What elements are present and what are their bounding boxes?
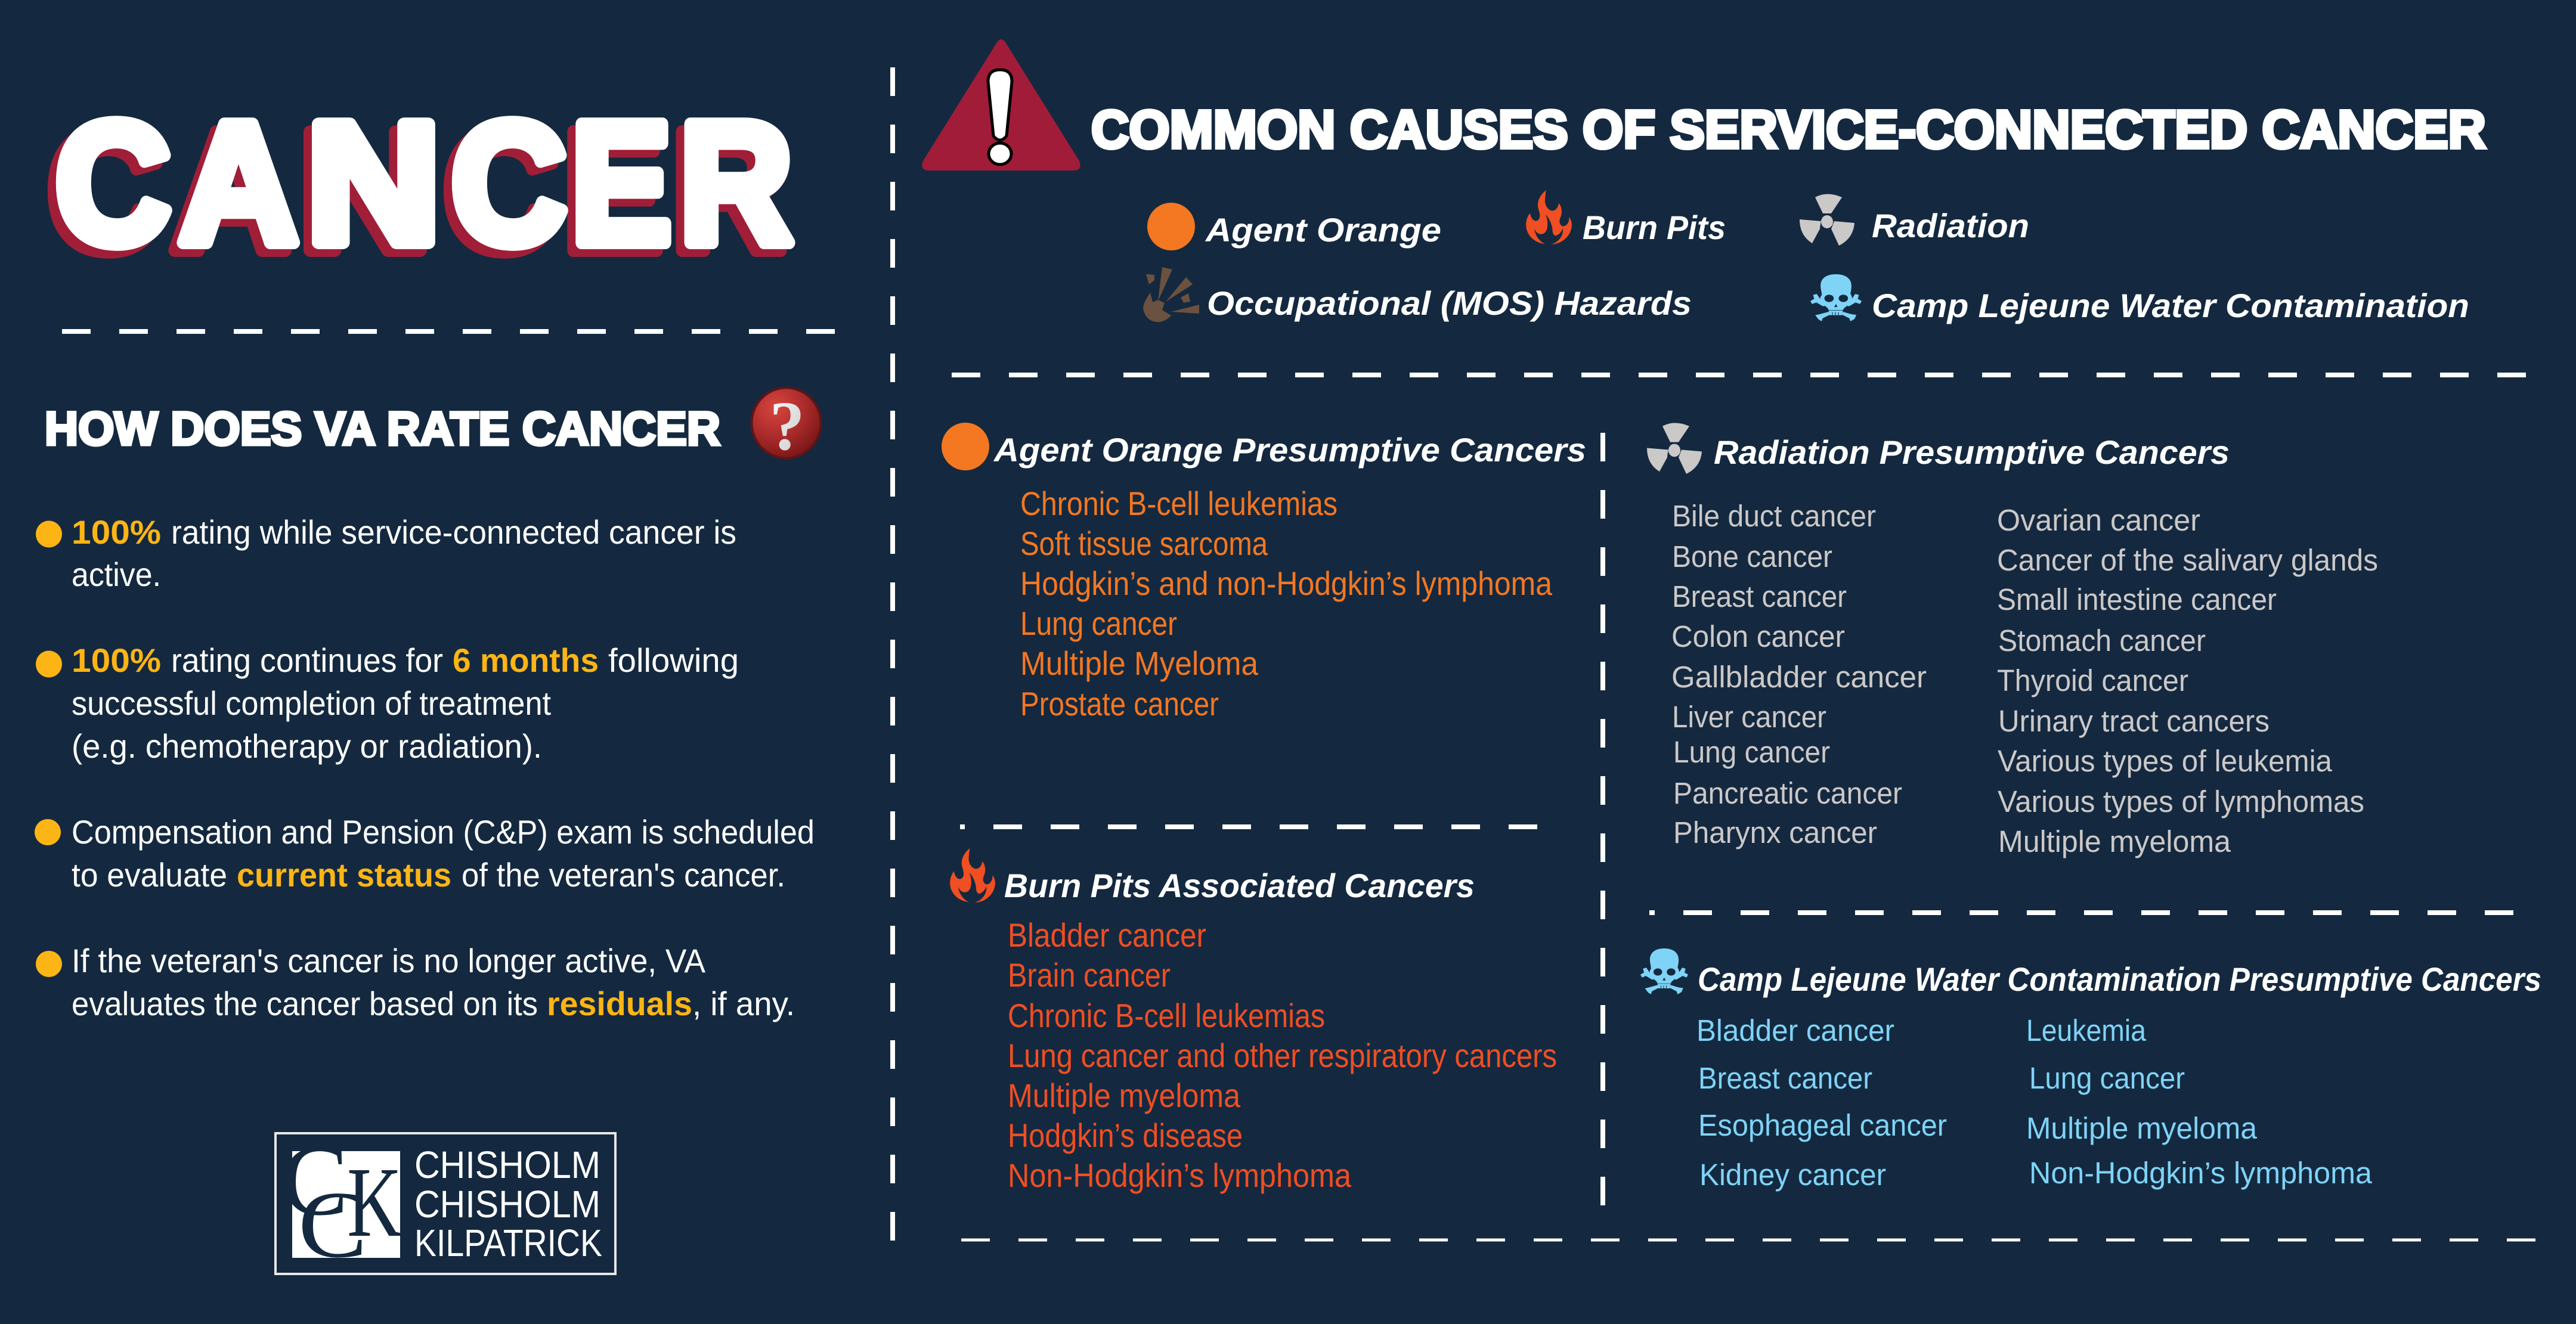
legend: common causes: Agent Orange: [1205, 211, 1441, 249]
legend: common causes: Occupational (MOS) Hazards: [1207, 284, 1692, 322]
title: CANCER: A: [179, 87, 298, 280]
rule 2: following: [608, 641, 739, 679]
icon: skull: [1640, 948, 1688, 994]
heading: Agent Orange Presumptive Cancers: [993, 431, 1586, 469]
heading: how does VA rate cancer: HOW DOES VA RATE CANCER: [45, 402, 720, 455]
rule 1: [36, 513, 736, 593]
list: Prostate cancer: [1020, 685, 1219, 723]
rule 2: successful completion of treatment: [72, 684, 551, 722]
list column 2: Thyroid cancer: [1997, 663, 2188, 697]
list: Hodgkin’s and non-Hodgkin’s lymphoma: [1020, 565, 1553, 602]
list column 2: Stomach cancer: [1998, 624, 2206, 658]
list: Bladder cancer: [1008, 916, 1206, 954]
panel: Camp Lejeune presumptive cancers: [1640, 948, 2541, 1192]
list column 1: Kidney cancer: [1699, 1158, 1886, 1192]
rule 4: residuals: [547, 985, 692, 1022]
rule 2: rating continues for: [171, 641, 443, 679]
rule 1: rating while service-connected cancer is: [171, 513, 736, 551]
rule 2: [36, 641, 739, 765]
list column 1: Bone cancer: [1672, 539, 1832, 573]
logo: Chisholm Chisholm Kilpatrick: CHISHOLM: [414, 1183, 600, 1226]
list column 2: Ovarian cancer: [1997, 503, 2200, 537]
list column 1: Esophageal cancer: [1698, 1108, 1947, 1142]
title: CANCER: [55, 87, 792, 280]
legend: common causes: Radiation: [1872, 207, 2029, 244]
title: CANCER: E: [571, 87, 671, 280]
logo: Chisholm Chisholm Kilpatrick: K: [347, 1147, 402, 1258]
rule 4: , if any.: [692, 985, 795, 1022]
list column 2: Multiple myeloma: [2026, 1111, 2258, 1145]
list column 2: Multiple myeloma: [1998, 824, 2231, 858]
logo: Chisholm Chisholm Kilpatrick: KILPATRICK: [414, 1221, 602, 1264]
logo: Chisholm Chisholm Kilpatrick: CHISHOLM: [414, 1143, 600, 1186]
list: Multiple Myeloma: [1020, 644, 1259, 682]
list column 2: Cancer of the salivary glands: [1997, 543, 2378, 577]
legend: common causes: Burn Pits: [1583, 209, 1726, 246]
rule 2: 100%: [72, 641, 161, 679]
icon: flame: [950, 848, 995, 903]
list column 2: Leukemia: [2026, 1013, 2147, 1047]
list column 1: Breast cancer: [1698, 1061, 1872, 1095]
icon: radiation: [1800, 194, 1854, 246]
title: CANCER: C: [55, 87, 171, 280]
list: Chronic B-cell leukemias: [1020, 485, 1337, 522]
list: Hodgkin’s disease: [1008, 1117, 1243, 1154]
title: CANCER: N: [306, 87, 441, 280]
list: Non-Hodgkin’s lymphoma: [1008, 1156, 1352, 1194]
icon: question mark: [751, 387, 821, 465]
list column 2: Various types of leukemia: [1998, 744, 2333, 778]
list: Lung cancer and other respiratory cancers: [1008, 1037, 1557, 1074]
rule 2: 6 months: [453, 641, 599, 679]
list: Lung cancer: [1020, 604, 1177, 642]
rule 3: [35, 813, 815, 894]
icon: warning triangle: [922, 39, 1080, 170]
list column 2: [2026, 1013, 2373, 1190]
rule 1: 100%: [72, 513, 161, 551]
rule 1: active.: [72, 556, 161, 593]
list: Soft tissue sarcoma: [1020, 525, 1268, 562]
heading: common causes: COMMON CAUSES OF SERVICE-CONNECTED CANCER: [1091, 100, 2486, 160]
rule 4: evaluates the cancer based on its: [72, 985, 538, 1022]
rule 3: current status: [237, 856, 451, 894]
list column 1: [1671, 499, 1927, 849]
list column 2: Small intestine cancer: [1997, 582, 2277, 616]
icon: orange circle: [942, 423, 989, 470]
title: CANCER: R: [680, 87, 792, 280]
list column 2: Non-Hodgkin’s lymphoma: [2029, 1156, 2373, 1190]
rule 2: (e.g. chemotherapy or radiation).: [72, 727, 542, 765]
panel: Burn Pits associated cancers: [950, 848, 1557, 1194]
rule 4: [36, 942, 795, 1022]
list column 1: Liver cancer: [1672, 700, 1826, 734]
icon: skull: [1810, 274, 1862, 321]
heading: Burn Pits Associated Cancers: [1004, 867, 1475, 904]
list column 1: Bladder cancer: [1696, 1013, 1894, 1047]
icon: radiation: [1647, 423, 1702, 474]
list: Multiple myeloma: [1008, 1077, 1241, 1114]
title: CANCER: C: [451, 87, 566, 280]
list column 1: Gallbladder cancer: [1671, 660, 1927, 694]
rule 3: of the veteran's cancer.: [462, 856, 785, 894]
panel: Radiation presumptive cancers: [1647, 423, 2378, 858]
list column 1: Colon cancer: [1671, 619, 1845, 653]
heading: Radiation Presumptive Cancers: [1714, 433, 2230, 471]
icon: flame: [1526, 190, 1572, 244]
list column 2: Urinary tract cancers: [1998, 704, 2270, 738]
list: Chronic B-cell leukemias: [1008, 997, 1325, 1034]
list: Brain cancer: [1008, 956, 1171, 994]
legend: common causes: Camp Lejeune Water Contamination: [1872, 287, 2469, 324]
panel: rating rules: [35, 513, 815, 1022]
list: [1020, 485, 1553, 723]
list column 2: Various types of lymphomas: [1998, 785, 2364, 818]
legend: common causes: [1143, 190, 2469, 324]
logo: Chisholm Chisholm Kilpatrick: C: [281, 1124, 348, 1236]
list column 1: Bile duct cancer: [1672, 499, 1876, 533]
panel: Agent Orange presumptive cancers: [942, 423, 1586, 723]
list column 1: Breast cancer: [1672, 579, 1847, 613]
list column 1: Lung cancer: [1673, 735, 1830, 769]
icon: orange circle: [1147, 203, 1195, 250]
icon: occupational hazard shards: [1143, 267, 1199, 322]
logo: Chisholm Chisholm Kilpatrick: [275, 1124, 615, 1278]
list column 1: Pancreatic cancer: [1673, 776, 1902, 810]
rule 4: If the veteran's cancer is no longer active, VA: [72, 942, 706, 979]
rule 3: Compensation and Pension (C&P) exam is scheduled: [72, 813, 815, 851]
list column 2: [1997, 503, 2378, 858]
list column 1: [1696, 1013, 1947, 1192]
list: [1008, 916, 1557, 1194]
list column 2: Lung cancer: [2029, 1061, 2185, 1095]
logo: Chisholm Chisholm Kilpatrick: C: [298, 1171, 367, 1278]
icon: question mark: ?: [769, 387, 805, 465]
list column 1: Pharynx cancer: [1673, 816, 1877, 849]
rule 3: to evaluate: [72, 856, 227, 894]
